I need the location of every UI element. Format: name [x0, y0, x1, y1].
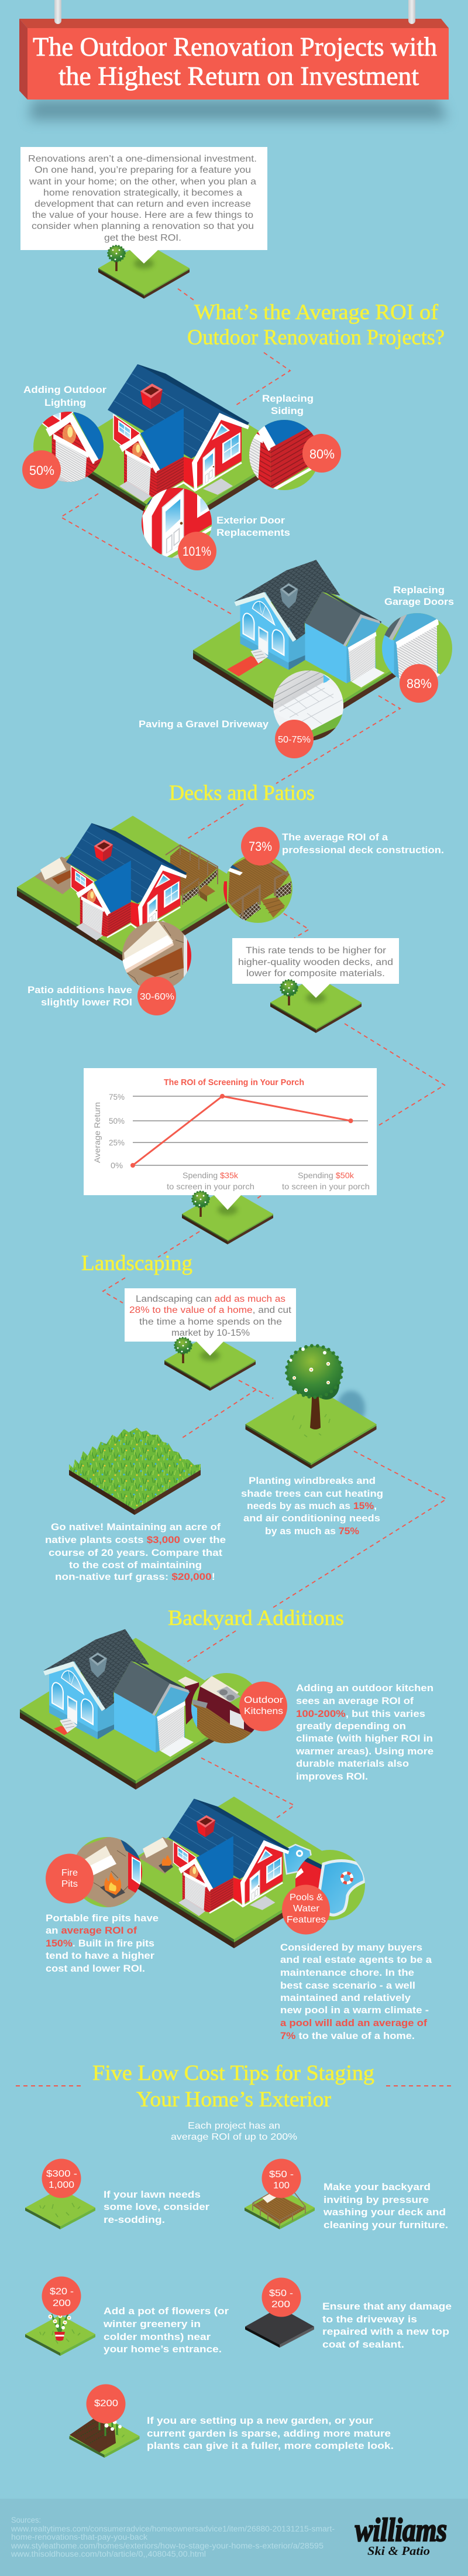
callout text: Landscaping can add as much as [136, 1294, 285, 1304]
chart: ROI of screening in your porch: to screen in your porch [282, 1182, 370, 1191]
label: exterior door replacements: Replacements [216, 527, 290, 538]
text: planting windbreaks: needs by as much as 15%, [247, 1500, 377, 1511]
tip: driveway sealant: to the driveway is [322, 2314, 417, 2325]
text: fire pits: an average ROI of [46, 1925, 137, 1936]
title text [33, 32, 437, 91]
label: patio additions [27, 984, 132, 1008]
badge: 30-60%: 30-60% [140, 992, 174, 1002]
chart: ROI of screening in your porch: 50% [109, 1116, 125, 1125]
chart: ROI of screening in your porch: 0% [111, 1161, 123, 1170]
tip: re-sodding: 1,000 [49, 2180, 74, 2190]
label: paving a gravel driveway: Paving a Gravel Driveway [139, 719, 269, 730]
lens: pool [295, 1850, 365, 1920]
callout text: 28% to the value of a home , and cut [129, 1305, 292, 1315]
heading: average ROI [187, 300, 445, 350]
lens: deck [223, 852, 292, 923]
logo: Williams Ski & Patio [355, 2512, 447, 2558]
badge: 80% [302, 434, 341, 473]
tip: mature garden plants: current garden is sparse, adding more mature [147, 2428, 391, 2439]
sources [11, 2516, 335, 2558]
intro text: consider when planning a renovation so that you [32, 221, 254, 231]
heading: decks and patios: Decks and Patios [169, 781, 315, 805]
text: go native: non-native turf grass: $20,000 ! [55, 1571, 215, 1582]
text: pools [280, 1942, 432, 2041]
text: pools: new pool in a warm climate - [280, 2004, 429, 2016]
tip: re-sodding: $300 - [46, 2169, 77, 2179]
intro text [28, 154, 257, 243]
heading: five low cost tips: Five Low Cost Tips for Staging [92, 2061, 374, 2085]
lens: outdoor kitchen [191, 1673, 254, 1743]
tip: driveway sealant [245, 2278, 452, 2350]
text: planting windbreaks: Planting windbreaks and [249, 1475, 376, 1486]
text: go native: Go native! Maintaining an acre of [51, 1521, 221, 1532]
intro text: On one hand, you’re preparing for a feature you [35, 165, 251, 175]
text: planting windbreaks: shade trees can cut heating [241, 1488, 383, 1499]
connector: dashed route [16, 289, 452, 2086]
badge: outdoor kitchens: Outdoor [244, 1695, 284, 1705]
text: go native [45, 1521, 226, 1582]
callout text: market by 10-15% [171, 1328, 250, 1338]
sources: Sources: [11, 2516, 41, 2524]
chart: ROI of screening in your porch: 75% [109, 1092, 125, 1101]
tip: flower pot [25, 2277, 229, 2356]
intro text: get the best ROI. [104, 233, 181, 243]
callout text [129, 1294, 292, 1338]
tip: re-sodding: some love, consider [104, 2201, 209, 2212]
subheading: each project: average ROI of up to 200% [171, 2132, 297, 2142]
tip: pressure washing: inviting by pressure [324, 2194, 429, 2205]
tip: mature garden plants: If you are setting up a new garden, or your [147, 2415, 373, 2426]
label: replacing garage doors: Replacing [393, 584, 445, 596]
badge: 101% [178, 532, 216, 570]
label: deck construction: professional deck construction. [282, 844, 444, 856]
badge: pools and water features [282, 1884, 330, 1935]
tip: re-sodding: re-sodding. [104, 2214, 165, 2225]
chart: ROI of screening in your porch [84, 1068, 377, 1210]
badge: 73%: 73% [249, 839, 272, 854]
tip: driveway sealant: Ensure that any damage [322, 2301, 452, 2312]
callout: landscaping value [125, 1288, 296, 1391]
label: patio additions: Patio additions have [27, 984, 132, 995]
chart: ROI of screening in your porch: Spending $35k [183, 1171, 239, 1180]
text: pools: a pool will add an average of [280, 2017, 427, 2028]
label: replacing garage doors: Garage Doors [384, 596, 454, 607]
text: outdoor kitchen: sees an average ROI of [296, 1695, 414, 1706]
sources: www.styleathome.com/homes/exteriors/how-to-stage-your-home-s-exterior/a/28595 [11, 2541, 324, 2550]
text: go native: course of 20 years. Compare that [49, 1547, 222, 1558]
tip: mature garden plants: $200 [94, 2399, 118, 2409]
label: replacing garage doors [384, 584, 454, 607]
text: fire pits: tend to have a higher [46, 1950, 154, 1961]
text: planting windbreaks: and air conditioning needs [243, 1513, 380, 1524]
text: pools: Considered by many buyers [280, 1942, 422, 1953]
text: pools: maintained and relatively [280, 1992, 411, 2003]
text: outdoor kitchen: 100-200% , but this varies [296, 1708, 425, 1719]
chart: ROI of screening in your porch: to screen in your porch [167, 1182, 254, 1191]
lens: siding [249, 420, 315, 490]
tip: pressure washing: cleaning your furniture. [324, 2219, 448, 2231]
illustration: blue house with kitchen [20, 1629, 252, 1790]
lens: outdoor lighting [33, 412, 104, 482]
intro text: development that can return and even increase [35, 199, 251, 209]
tip: pressure washing: 100 [273, 2181, 290, 2191]
badge: 88% [400, 664, 438, 703]
text: outdoor kitchen: warmer areas). Using more [295, 1746, 433, 1757]
sources: www.thisoldhouse.com/toh/article/0,,408045,00.html [11, 2550, 206, 2558]
chart: ROI of screening in your porch: The ROI of Screening in Your Porch [164, 1077, 304, 1087]
text: outdoor kitchen: Adding an outdoor kitchen [296, 1682, 433, 1694]
tip: driveway sealant: $50 - [269, 2288, 293, 2298]
illustration: red house [60, 364, 291, 531]
title banner [19, 0, 449, 120]
callout text [238, 946, 393, 979]
lens: exterior door [142, 488, 212, 558]
text: outdoor kitchen: improves ROI. [296, 1771, 368, 1782]
text: outdoor kitchen: durable materials also [296, 1758, 409, 1769]
badge: 30-60% [137, 977, 176, 1015]
callout text: lower for composite materials. [246, 969, 385, 979]
label: replacing siding [262, 393, 314, 416]
text: fire pits: Portable fire pits have [46, 1913, 159, 1924]
label: adding outdoor lighting [23, 384, 106, 408]
chart: ROI of screening in your porch: Spending $50k [298, 1171, 355, 1180]
badge: fire pits: Pits [61, 1879, 78, 1889]
label: deck construction [282, 832, 444, 856]
label: replacing siding: Replacing [262, 393, 314, 404]
badge: fire pits: Fire [61, 1868, 78, 1878]
text: planting windbreaks [241, 1475, 383, 1537]
subheading: each project [171, 2121, 297, 2142]
text: go native: to the cost of maintaining [69, 1559, 202, 1571]
badge: 101%: 101% [183, 544, 211, 559]
text: pools: maintenance chore. In the [280, 1967, 414, 1978]
heading: average ROI: Outdoor Renovation Projects? [187, 326, 445, 350]
badge: 50% [22, 450, 61, 489]
illustration: red house with fire pit and pool [118, 1797, 350, 1948]
tip: pressure washing: Make your backyard [324, 2181, 431, 2192]
intro text: Renovations aren’t a one-dimensional investment. [28, 154, 257, 164]
intro text: want in your home; on the other, when you plan a [29, 177, 256, 187]
tip: flower pot: winter greenery in [103, 2318, 201, 2329]
badge: pools and water features: Features [287, 1915, 326, 1925]
callout: wood quality [232, 938, 399, 1033]
tip: flower pot: Add a pot of flowers (or [104, 2305, 229, 2317]
footer panel [0, 2499, 468, 2576]
sources: home-renovations-that-pay-you-back [11, 2533, 147, 2541]
label: adding outdoor lighting: Adding Outdoor [23, 384, 106, 395]
tip: flower pot: 200 [53, 2298, 71, 2308]
text: go native: native plants costs $3,000 over the [45, 1534, 226, 1545]
text: pools: best case scenario - a well [280, 1980, 415, 1991]
lens: garage doors [382, 613, 452, 679]
tip: pressure washing: washing your deck and [323, 2206, 446, 2218]
text: planting windbreaks: by as much as 75% [265, 1525, 359, 1537]
badge: 88%: 88% [407, 676, 432, 691]
illustration: native grass tile [69, 1428, 201, 1515]
text: fire pits: 150%. Built in fire pits [46, 1938, 154, 1949]
label: deck construction: The average ROI of a [282, 832, 388, 843]
tip: pressure washing [245, 2158, 448, 2231]
intro text: home renovation strategically, it becomes a [43, 188, 242, 198]
badge: 50-75%: 50-75% [278, 735, 311, 745]
tip: driveway sealant: 200 [271, 2300, 290, 2310]
tip: flower pot: colder months) near [104, 2331, 211, 2342]
tip: driveway sealant: repaired with a new top [322, 2326, 449, 2337]
badge: outdoor kitchens [239, 1682, 287, 1731]
illustration: red house with deck and patio [17, 816, 249, 967]
callout text: the time a home spends on the [139, 1317, 282, 1327]
label: patio additions: slightly lower ROI [41, 997, 132, 1008]
text: outdoor kitchen: climate (with higher ROI in [296, 1733, 433, 1744]
badge: pools and water features: Water [293, 1904, 320, 1914]
chart: ROI of screening in your porch: 25% [109, 1138, 125, 1147]
logo: Williams Ski & Patio: williams [355, 2512, 447, 2548]
logo: Williams Ski & Patio: Ski & Patio [367, 2544, 430, 2558]
tip: driveway sealant: coat of sealant. [322, 2339, 404, 2350]
heading: backyard additions: Backyard Additions [168, 1606, 344, 1630]
label: exterior door replacements: Exterior Door [216, 515, 285, 526]
badge: 50%: 50% [29, 463, 54, 478]
tip: pressure washing: $50 - [269, 2170, 294, 2180]
badge: outdoor kitchens: Kitchens [244, 1706, 283, 1716]
lens: fire pit [76, 1837, 142, 1907]
badge: fire pits [46, 1854, 94, 1903]
badge: pools and water features: Pools & [290, 1893, 323, 1903]
illustration: shade tree tile [246, 1346, 377, 1469]
panel: intro callout with tile [20, 147, 267, 299]
tip: flower pot: your home’s entrance. [104, 2344, 222, 2355]
text: fire pits: cost and lower ROI. [46, 1963, 145, 1974]
heading: landscaping: Landscaping [81, 1251, 192, 1275]
icon: tree on chart tile [192, 1191, 209, 1217]
sources: www.realtytimes.com/consumeradvice/homeownersadvice1/item/26880-20131215-smart- [11, 2524, 335, 2533]
heading: five low cost tips [92, 2061, 374, 2112]
heading: average ROI: What’s the Average ROI of [194, 300, 439, 324]
text: pools: and real estate agents to be a [280, 1954, 432, 1965]
text: pools: 7% to the value of a home. [280, 2030, 415, 2041]
tip: flower pot: $20 - [50, 2287, 74, 2297]
intro text: the value of your house. Here are a few things to [32, 210, 253, 220]
title text: The Outdoor Renovation Projects with [33, 32, 437, 61]
tip: re-sodding [25, 2158, 209, 2229]
text: outdoor kitchen [295, 1682, 433, 1782]
lens: patio [122, 921, 191, 986]
chart: ROI of screening in your porch: Average Return [92, 1102, 102, 1163]
text: outdoor kitchen: greatly depending on [296, 1720, 406, 1732]
callout text: higher-quality wooden decks, and [238, 957, 393, 967]
heading: five low cost tips: Your Home’s Exterior [136, 2088, 331, 2112]
label: exterior door replacements [216, 515, 290, 538]
lens: gravel driveway [273, 670, 343, 740]
label: replacing siding: Siding [271, 405, 304, 416]
label: adding outdoor lighting: Lighting [44, 397, 86, 408]
subheading: each project: Each project has an [188, 2121, 280, 2131]
tile under chart [182, 1188, 273, 1244]
callout text: This rate tends to be higher for [246, 946, 386, 956]
illustration: blue house [193, 560, 425, 730]
tip: mature garden plants [69, 2385, 394, 2458]
text: fire pits [46, 1913, 159, 1974]
badge: 80%: 80% [309, 447, 335, 461]
tip: re-sodding: If your lawn needs [104, 2189, 201, 2200]
badge: 73% [241, 827, 280, 865]
badge: 50-75% [275, 720, 314, 758]
title text: the Highest Return on Investment [58, 61, 419, 91]
tip: mature garden plants: plants can give it a fuller, more complete look. [147, 2440, 394, 2451]
